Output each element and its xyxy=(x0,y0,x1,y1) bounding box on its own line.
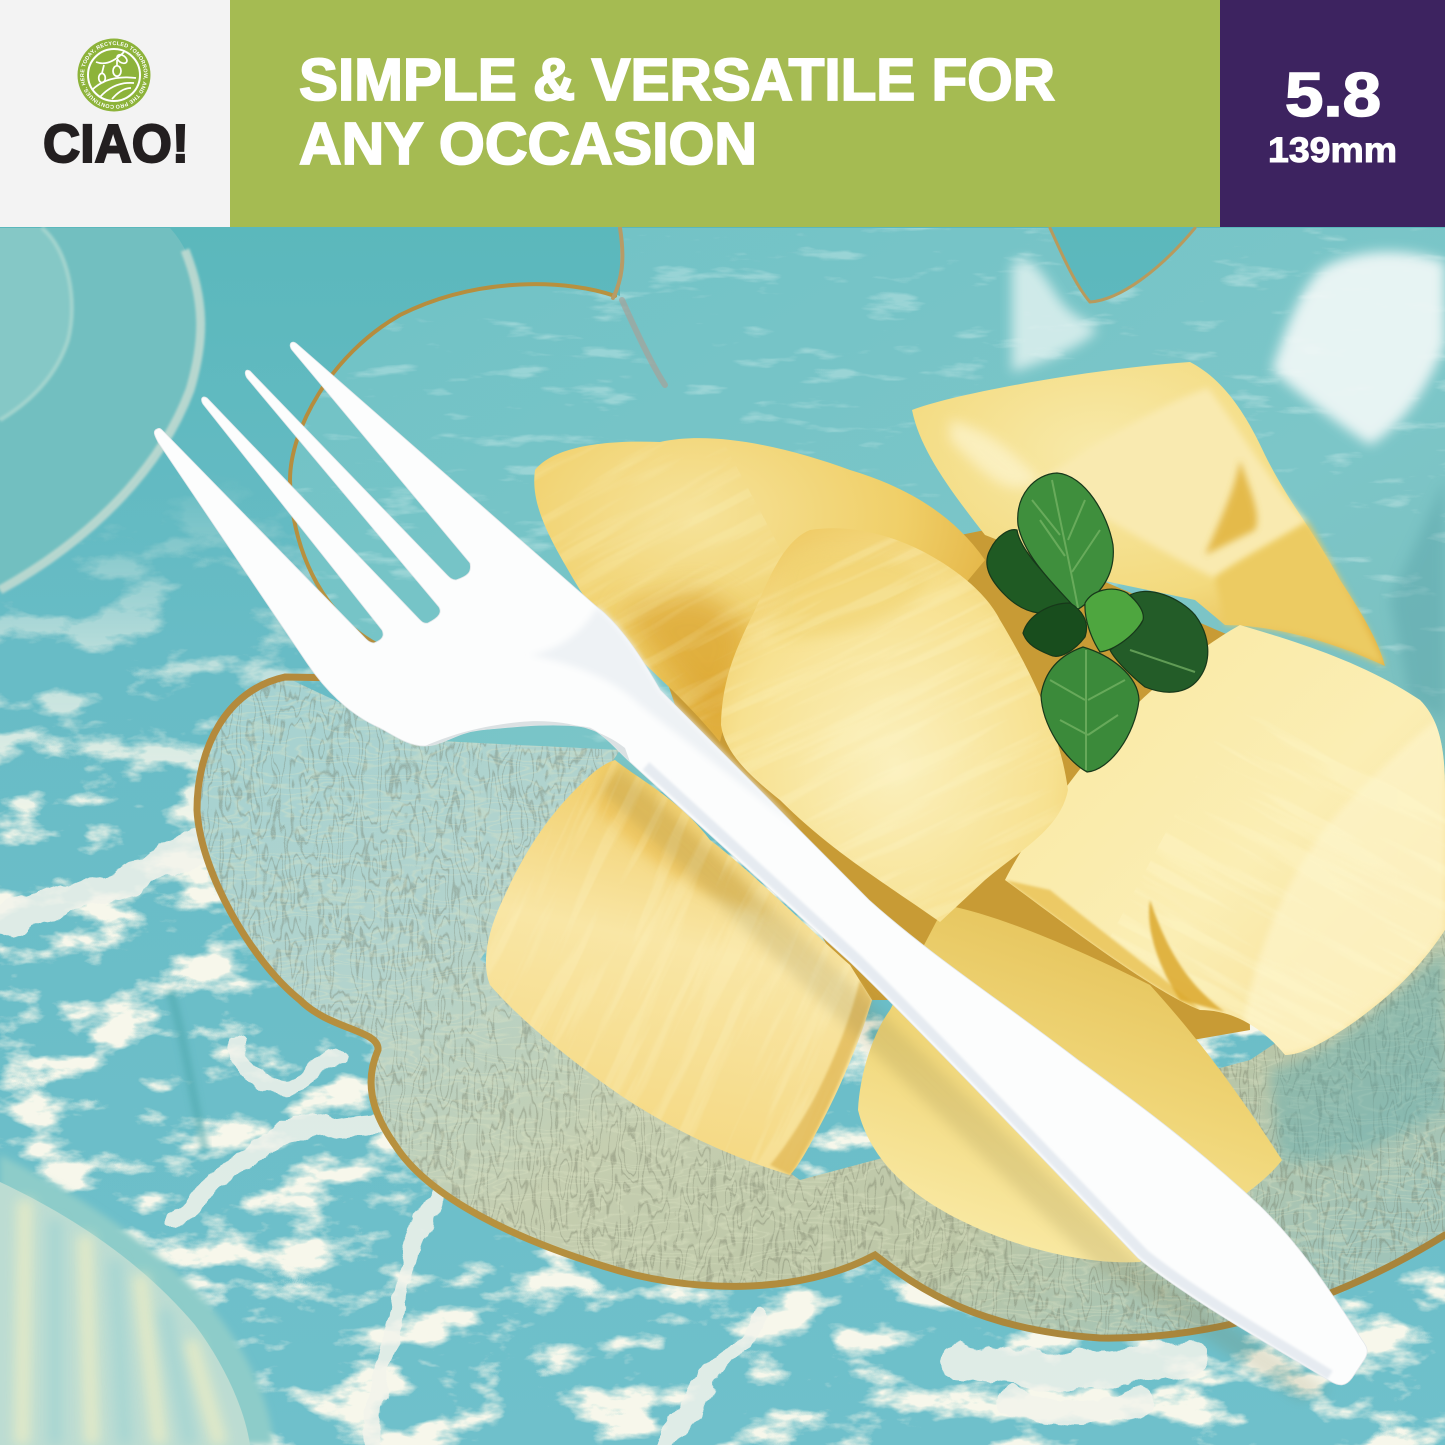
mint leaf top xyxy=(1018,473,1113,610)
mint small leaf dark xyxy=(1023,603,1087,656)
icon: mint sprig xyxy=(987,473,1208,772)
lower glass xyxy=(197,677,1445,1338)
brand name: CIAO! xyxy=(43,114,189,174)
fork head lower shadow xyxy=(425,721,630,762)
pineapple chunk bottom xyxy=(858,905,1282,1262)
heading: ANY OCCASION xyxy=(299,111,757,177)
handle lower facet xyxy=(646,766,1330,1375)
size in millimetres: 139mm xyxy=(1268,131,1397,170)
pineapple shadow base xyxy=(640,530,1250,1050)
icon: round olive badge xyxy=(78,38,150,112)
heading: SIMPLE & VERSATILE FOR xyxy=(299,47,1055,113)
mint leaf bottom xyxy=(1041,647,1139,772)
size in inches: 5.8 xyxy=(1285,61,1381,130)
pineapple chunk back right xyxy=(912,362,1385,666)
fork shadow xyxy=(600,765,1330,1400)
gold rim xyxy=(197,228,1445,1338)
header bar xyxy=(0,0,1445,227)
olive branch xyxy=(92,52,136,99)
mint leaf right xyxy=(1110,592,1208,692)
pineapple chunk lower left xyxy=(486,760,873,1176)
panel: purple size band xyxy=(1220,0,1445,227)
mint leaf left dark xyxy=(987,530,1073,613)
glass dish bottom left xyxy=(0,1155,274,1445)
pineapple chunk center xyxy=(721,528,1068,922)
fork body with tines xyxy=(154,342,1367,1385)
heading xyxy=(299,47,1055,177)
panel: green title band xyxy=(230,0,1220,227)
panel: logo xyxy=(0,0,230,227)
glass bowl xyxy=(190,228,1445,1350)
glass saucer top left xyxy=(0,228,203,592)
fork neck shading xyxy=(530,607,800,830)
glass highlight upper right xyxy=(1272,252,1445,445)
pineapple chunk back left xyxy=(534,438,985,742)
fork xyxy=(154,342,1367,1400)
mint small leaf bright xyxy=(1085,589,1143,652)
pineapple chunk right xyxy=(1005,625,1445,1055)
